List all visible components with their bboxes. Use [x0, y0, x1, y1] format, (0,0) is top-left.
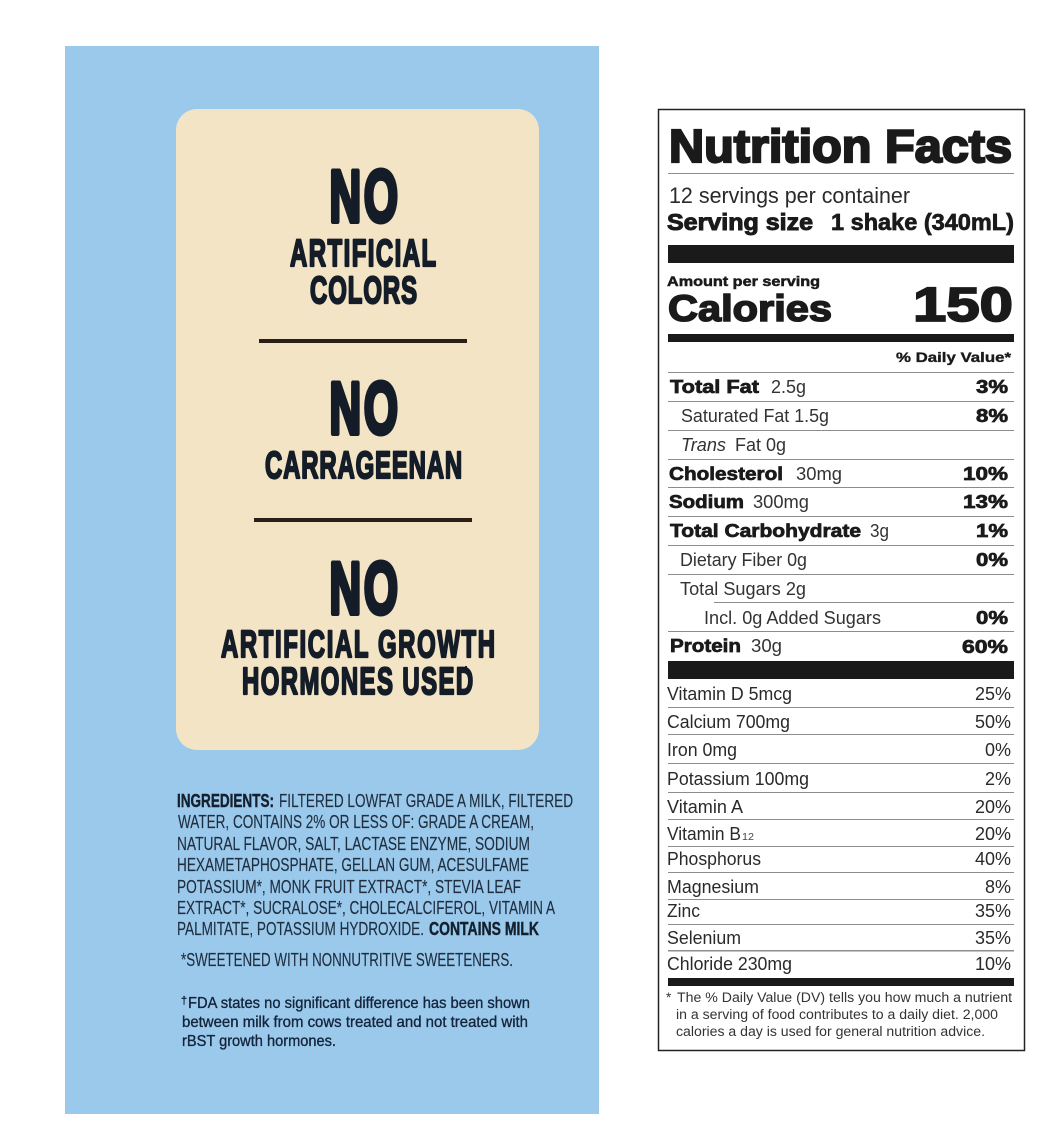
- row: potassium: 2%: [985, 768, 1011, 789]
- row: vitamin B12: 12: [742, 831, 754, 843]
- row: potassium: [667, 768, 1011, 789]
- row: saturated fat: 8%: [976, 406, 1008, 426]
- FDA footnote: rBST growth hormones.: [182, 1033, 336, 1050]
- claim: no artificial growth hormones used: [221, 548, 495, 702]
- row: zinc: 35%: [975, 900, 1011, 921]
- FDA footnote: [181, 995, 530, 1050]
- row: phosphorus: 40%: [975, 848, 1011, 869]
- row: total fat: 3%: [976, 377, 1008, 397]
- FDA footnote: †: [181, 995, 187, 1007]
- row: vitamin B12: Vitamin B: [667, 823, 741, 844]
- calories block: [667, 274, 1013, 332]
- row: total carbohydrate: Total Carbohydrate: [670, 521, 861, 541]
- panel: cream claims card: [176, 109, 539, 750]
- daily value footnote: [666, 990, 1012, 1039]
- FDA footnote: between milk from cows treated and not treated with: [182, 1014, 528, 1031]
- row: chloride: [667, 953, 1011, 974]
- row: cholesterol: 10%: [963, 464, 1008, 484]
- row: protein: [670, 636, 1008, 657]
- claim: no artificial growth hormones used: ARTIFICIAL GROWTH: [221, 622, 495, 665]
- row: iron: Iron 0mg: [667, 739, 737, 760]
- row: dietary fiber: Dietary Fiber 0g: [680, 550, 807, 570]
- row: dietary fiber: 0%: [976, 550, 1008, 570]
- row: magnesium: Magnesium: [667, 876, 759, 897]
- row: protein: 60%: [962, 637, 1008, 657]
- ingredients list: FILTERED LOWFAT GRADE A MILK, FILTERED: [279, 791, 573, 811]
- ingredients list: INGREDIENTS:: [177, 791, 274, 811]
- row: phosphorus: Phosphorus: [667, 848, 761, 869]
- row: zinc: Zinc: [667, 900, 700, 921]
- claim: no artificial colors: COLORS: [310, 268, 417, 311]
- row: magnesium: [667, 876, 1011, 897]
- calories block: 150: [913, 279, 1013, 332]
- daily value footnote: calories a day is used for general nutrition advice.: [676, 1024, 985, 1039]
- row: saturated fat: [681, 406, 1008, 426]
- claim: no artificial colors: ARTIFICIAL: [290, 231, 436, 274]
- row: saturated fat: Saturated Fat 1.5g: [681, 406, 829, 426]
- claim: no carrageenan: CARRAGEENAN: [265, 443, 462, 486]
- row: calcium: Calcium 700mg: [667, 711, 790, 732]
- daily value footnote: in a serving of food contributes to a daily diet. 2,000: [676, 1007, 998, 1022]
- sweetener note: *SWEETENED WITH NONNUTRITIVE SWEETENERS.: [181, 950, 513, 970]
- row: iron: [667, 739, 1011, 760]
- claim: no artificial colors: [290, 156, 436, 311]
- claim: no artificial colors: NO: [330, 156, 398, 237]
- ingredients list: [177, 791, 573, 939]
- row: vitamin D: 25%: [975, 683, 1011, 704]
- daily value footnote: *: [666, 990, 672, 1005]
- FDA footnote: FDA states no significant difference has been shown: [188, 995, 530, 1012]
- row: cholesterol: [669, 464, 1008, 484]
- ingredients list: EXTRACT*, SUCRALOSE*, CHOLECALCIFEROL, VITAMIN A: [177, 898, 555, 918]
- row: trans fat: [681, 435, 786, 455]
- row: protein: Protein: [670, 636, 741, 656]
- row: cholesterol: Cholesterol: [669, 464, 783, 484]
- row: total sugars: Total Sugars 2g: [680, 579, 806, 599]
- row: dietary fiber: [680, 550, 1008, 570]
- row: chloride: 10%: [975, 953, 1011, 974]
- row: added sugars: 0%: [976, 608, 1008, 628]
- row: selenium: 35%: [975, 927, 1011, 948]
- row: vitamin A: Vitamin A: [667, 796, 744, 817]
- servings information: 1 shake (340mL): [831, 209, 1014, 235]
- row: sodium: [669, 492, 1008, 512]
- row: total carbohydrate: 1%: [976, 521, 1008, 541]
- row: chloride: Chloride 230mg: [667, 953, 792, 974]
- panel: blue claims and ingredients: [65, 46, 599, 1114]
- row: sodium: Sodium: [669, 492, 744, 512]
- row: trans fat: Fat 0g: [735, 435, 786, 455]
- daily value footnote: The % Daily Value (DV) tells you how much a nutrient: [677, 990, 1012, 1005]
- ingredients list: CONTAINS MILK: [429, 919, 539, 939]
- servings information: [667, 183, 1014, 235]
- row: calcium: [667, 711, 1011, 732]
- heading: Nutrition Facts: Nutrition Facts: [669, 120, 1012, 172]
- daily value header: % Daily Value*: [896, 349, 1012, 365]
- row: zinc: [667, 900, 1011, 921]
- row: vitamin D: Vitamin D 5mcg: [667, 683, 792, 704]
- claim: no carrageenan: [265, 368, 462, 486]
- row: total fat: Total Fat: [670, 377, 759, 397]
- row: vitamin B12: [667, 823, 1011, 844]
- ingredients list: POTASSIUM*, MONK FRUIT EXTRACT*, STEVIA LEAF: [177, 877, 521, 897]
- ingredients list: PALMITATE, POTASSIUM HYDROXIDE.: [177, 919, 424, 939]
- row: sodium: 300mg: [753, 492, 809, 512]
- servings information: Serving size: [667, 209, 813, 235]
- row: selenium: Selenium: [667, 927, 741, 948]
- panel: nutrition facts label: [658, 110, 1024, 1050]
- row: vitamin D: [667, 683, 1011, 704]
- ingredients list: WATER, CONTAINS 2% OR LESS OF: GRADE A CREAM,: [178, 812, 534, 832]
- claim: no carrageenan: NO: [330, 368, 398, 449]
- row: selenium: [667, 927, 1011, 948]
- row: total carbohydrate: [670, 521, 1008, 541]
- ingredients list: NATURAL FLAVOR, SALT, LACTASE ENZYME, SODIUM: [177, 834, 530, 854]
- row: trans fat: Trans: [681, 435, 726, 455]
- row: phosphorus: [667, 848, 1011, 869]
- calories block: Amount per serving: [667, 274, 820, 289]
- row: total fat: [670, 377, 1008, 397]
- row: vitamin B12: 20%: [975, 823, 1011, 844]
- row: cholesterol: 30mg: [796, 464, 842, 484]
- row: vitamin A: 20%: [975, 796, 1011, 817]
- row: total carbohydrate: 3g: [870, 521, 889, 541]
- calories block: Calories: [668, 288, 832, 329]
- row: potassium: Potassium 100mg: [667, 768, 809, 789]
- row: added sugars: [704, 608, 1008, 628]
- row: added sugars: Incl. 0g Added Sugars: [704, 608, 881, 628]
- row: vitamin A: [667, 796, 1011, 817]
- servings information: 12 servings per container: [669, 183, 910, 208]
- row: sodium: 13%: [963, 492, 1008, 512]
- row: calcium: 50%: [975, 711, 1011, 732]
- row: protein: 30g: [751, 636, 782, 656]
- ingredients list: HEXAMETAPHOSPHATE, GELLAN GUM, ACESULFAME: [177, 855, 529, 875]
- row: iron: 0%: [985, 739, 1011, 760]
- row: magnesium: 8%: [985, 876, 1011, 897]
- claim: no artificial growth hormones used: NO: [330, 548, 398, 629]
- row: total fat: 2.5g: [771, 377, 806, 397]
- claim: no artificial growth hormones used: HORMONES USED: [242, 659, 473, 702]
